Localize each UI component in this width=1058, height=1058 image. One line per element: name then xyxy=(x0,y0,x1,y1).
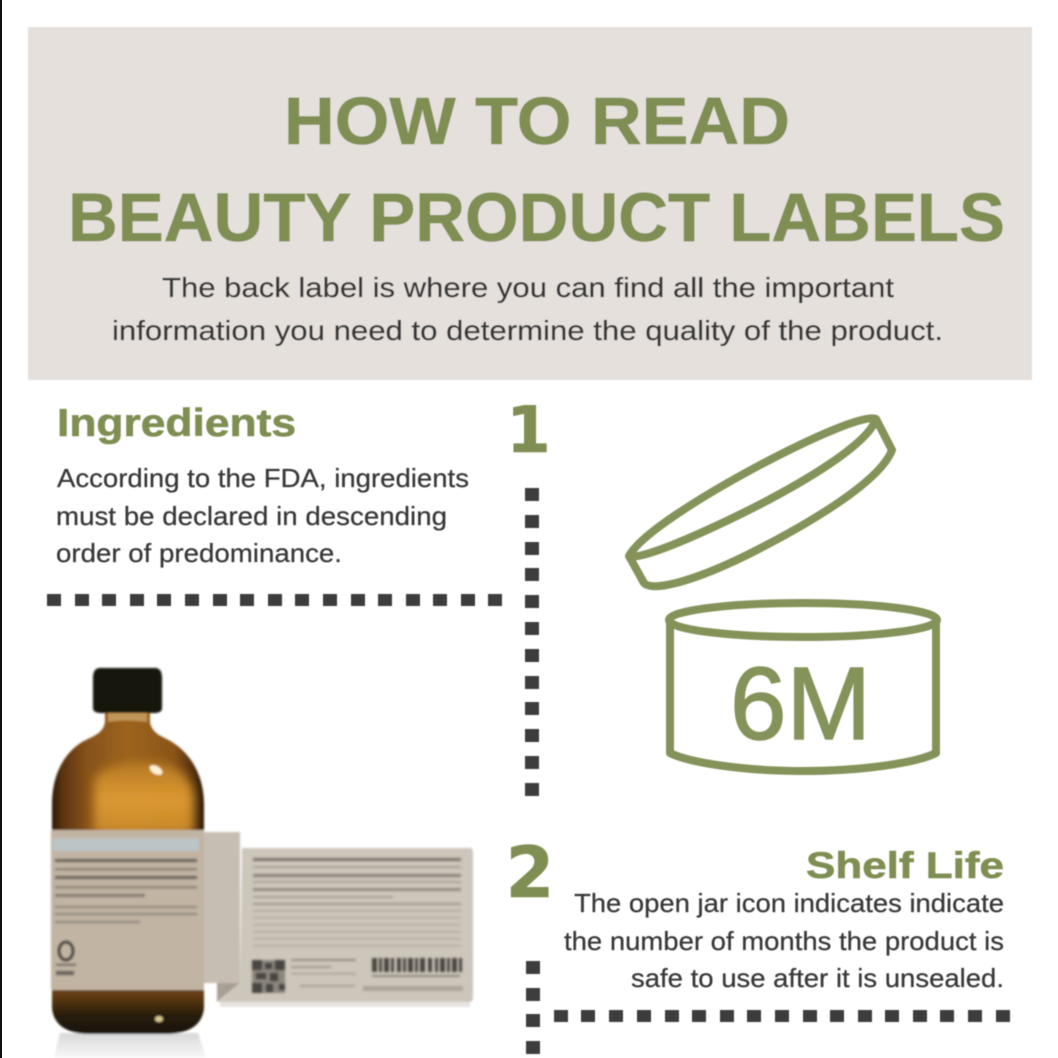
title xyxy=(68,84,1005,256)
title: HOW TO READ xyxy=(284,84,790,159)
bottle inner glow xyxy=(94,762,194,835)
jar body xyxy=(669,603,937,771)
shadow under back label xyxy=(220,1002,470,1007)
title: BEAUTY PRODUCT LABELS xyxy=(68,179,1005,256)
dotted divider: lower xyxy=(526,961,1010,1054)
header intro text: information you need to determine the quality of the product. xyxy=(112,315,943,346)
heading: shelf life: Shelf Life xyxy=(806,845,1004,886)
highlight xyxy=(148,763,164,777)
dotted divider: vertical upper xyxy=(525,488,539,796)
number 2: 2 xyxy=(506,832,554,914)
icon: open jar 6M xyxy=(629,418,937,771)
dotted divider: horizontal upper xyxy=(47,594,502,606)
bottle cap xyxy=(93,668,162,713)
ingredients text: must be declared in descending xyxy=(56,501,447,531)
ingredients text: According to the FDA, ingredients xyxy=(57,463,469,493)
ingredients text: order of predominance. xyxy=(56,538,342,568)
front label fine print xyxy=(55,859,197,923)
product image: bottle with unfolded back label xyxy=(51,668,473,1058)
front label xyxy=(51,830,204,990)
page edge line xyxy=(0,0,2,1058)
label fine print and codes xyxy=(55,858,463,993)
bottle base xyxy=(52,985,204,1034)
shelf life text: safe to use after it is unsealed. xyxy=(631,963,1004,993)
jar lid xyxy=(629,418,892,586)
shelf life text: the number of months the product is xyxy=(564,926,1004,956)
barcode xyxy=(372,958,462,977)
neck highlight xyxy=(108,712,147,722)
section: shelf life xyxy=(564,845,1004,993)
ingredients text xyxy=(56,463,469,568)
shelf life text: The open jar icon indicates indicate xyxy=(574,888,1004,918)
back label fine print xyxy=(253,858,463,991)
header intro text: The back label is where you can find all the important xyxy=(162,272,894,303)
section: ingredients xyxy=(56,402,469,568)
front label logo xyxy=(59,942,73,960)
panel: header xyxy=(28,27,1032,380)
shelf life text xyxy=(564,888,1004,993)
jar label 6M: 6M xyxy=(730,646,871,761)
back label xyxy=(218,848,473,1002)
heading: ingredients: Ingredients xyxy=(57,402,296,445)
number 1: 1 xyxy=(506,394,551,468)
flap and folded strip xyxy=(203,832,240,983)
floor reflection xyxy=(54,1033,206,1058)
header intro text xyxy=(112,272,943,346)
bottle glass xyxy=(52,705,204,1034)
QR code xyxy=(252,960,285,993)
